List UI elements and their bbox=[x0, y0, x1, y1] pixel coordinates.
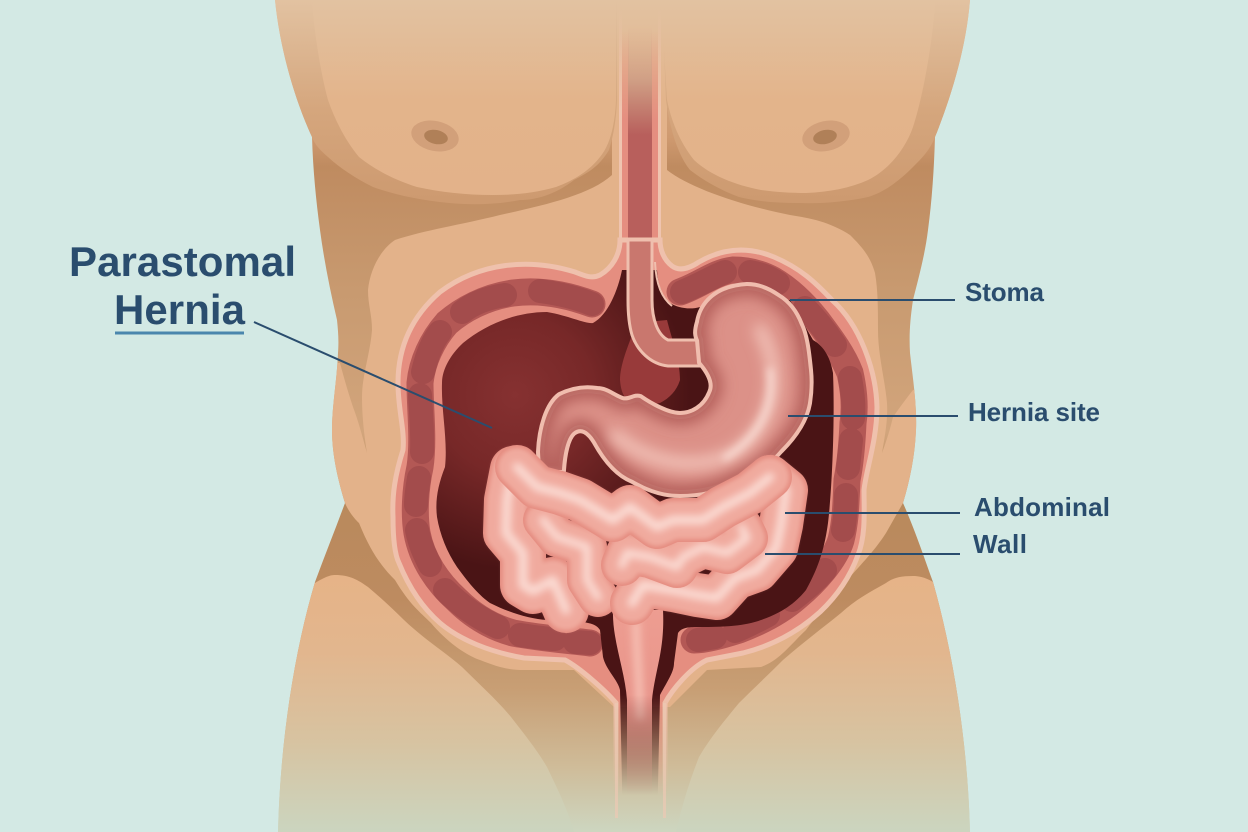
label: Abdominal Wall bbox=[765, 492, 1110, 559]
torso bbox=[260, 0, 990, 832]
lower right coil bbox=[632, 477, 786, 603]
title bbox=[69, 238, 296, 334]
abdomen light area bbox=[332, 120, 916, 707]
title: Parastomal bbox=[69, 238, 296, 285]
right pectoral bbox=[665, 64, 927, 193]
label: Stoma: Stoma bbox=[965, 277, 1045, 307]
wall muscle right band bbox=[680, 270, 854, 640]
nipple left bbox=[408, 116, 462, 156]
central reddish mass bbox=[620, 320, 680, 404]
inner left coil bbox=[543, 520, 598, 597]
muscle capsules bbox=[416, 272, 853, 643]
label: Abdominal Wall: Abdominal bbox=[974, 492, 1110, 522]
label: Abdominal Wall: Wall bbox=[973, 529, 1027, 559]
wall muscle left band bbox=[415, 292, 592, 643]
stomach bbox=[540, 286, 810, 494]
cavity interior bbox=[436, 270, 834, 832]
lower channel pale edges bbox=[615, 703, 666, 818]
abdominal wall bbox=[393, 240, 877, 832]
center chest strip bbox=[617, 0, 664, 68]
label: Hernia site: Hernia site bbox=[968, 397, 1100, 427]
small intestine bbox=[506, 467, 786, 610]
right leg bbox=[686, 576, 970, 828]
esophagus lower tube bbox=[628, 240, 702, 366]
top coil bbox=[517, 467, 770, 527]
left pectoral shadow band bbox=[270, 0, 617, 204]
wall lining bbox=[393, 240, 877, 832]
rectum tube bbox=[612, 610, 664, 776]
body silhouette bbox=[260, 0, 990, 832]
leader line: title to cavity bbox=[254, 322, 492, 428]
esophagus upper channel bbox=[619, 0, 661, 250]
nipple right bbox=[799, 116, 853, 156]
left pectoral bbox=[320, 64, 616, 195]
left coil bbox=[506, 469, 566, 610]
title: Hernia bbox=[114, 286, 246, 333]
right pectoral shadow band bbox=[662, 0, 975, 203]
left leg bbox=[278, 575, 560, 827]
middle coil bbox=[622, 528, 747, 567]
